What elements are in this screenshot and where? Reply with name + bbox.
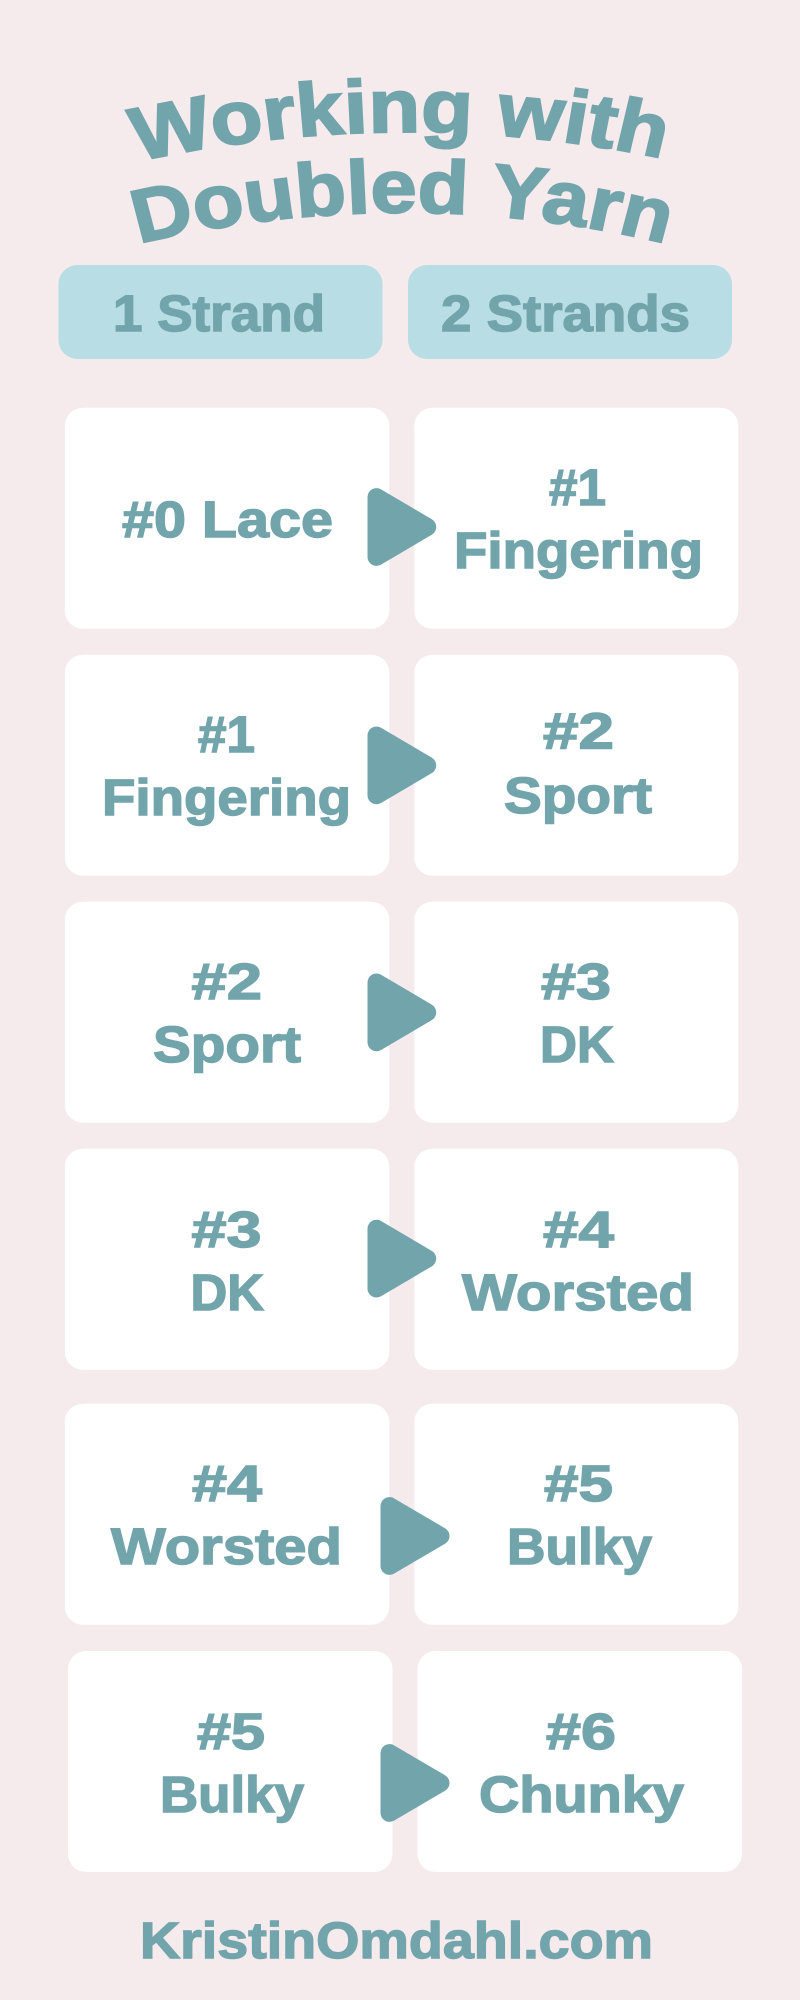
row 1 right card: Fingering xyxy=(454,522,703,579)
row 5 right card: Bulky xyxy=(507,1518,653,1575)
row 3 left card xyxy=(65,902,389,1123)
row 4 left card xyxy=(65,1149,389,1370)
row 1 right card: #1 xyxy=(549,459,606,516)
row 2 right card xyxy=(414,655,738,876)
header: 1 Strand: 1 Strand xyxy=(113,285,325,342)
row 2 left card xyxy=(65,655,389,876)
row 6 left card: #5 xyxy=(197,1703,265,1760)
row 3 right card xyxy=(414,902,738,1123)
row 4 left card: #3 xyxy=(192,1201,262,1258)
row 6 right card xyxy=(418,1651,742,1872)
row 5 left card: #4 xyxy=(192,1455,263,1512)
row 5 right card xyxy=(414,1404,738,1625)
arrow row 1 xyxy=(376,497,427,557)
arrow row 6 xyxy=(390,1753,440,1813)
row 5 left card xyxy=(65,1404,389,1625)
row 3 right card: #3 xyxy=(541,953,611,1010)
row 5 right card: #5 xyxy=(544,1455,613,1512)
arrow row 4 xyxy=(376,1229,427,1288)
row 3 right card: DK xyxy=(540,1016,614,1073)
footer website: KristinOmdahl.com xyxy=(140,1912,653,1969)
row 1 left card xyxy=(65,408,389,629)
row 2 left card: #1 xyxy=(198,706,255,763)
header: 2 Strands xyxy=(408,265,732,359)
row 3 left card: Sport xyxy=(153,1016,301,1073)
row 2 right card: Sport xyxy=(504,767,652,824)
row 5 left card: Worsted xyxy=(111,1518,342,1575)
row 4 right card: Worsted xyxy=(462,1264,694,1321)
row 2 left card: Fingering xyxy=(102,769,351,826)
header: 1 Strand xyxy=(58,265,382,359)
row 6 left card xyxy=(68,1651,392,1872)
row 6 right card: #6 xyxy=(546,1703,616,1760)
row 4 right card: #4 xyxy=(543,1201,615,1258)
arrow row 2 xyxy=(376,736,427,795)
header: 2 Strands: 2 Strands xyxy=(441,285,690,342)
row 1 left card: #0 Lace xyxy=(122,491,333,548)
row 3 left card: #2 xyxy=(192,953,262,1010)
row 4 right card xyxy=(414,1149,738,1370)
row 6 left card: Bulky xyxy=(160,1766,305,1823)
row 6 right card: Chunky xyxy=(479,1766,685,1823)
title xyxy=(124,78,670,244)
row 1 right card xyxy=(414,408,738,629)
arrow row 5 xyxy=(390,1506,440,1566)
row 2 right card: #2 xyxy=(543,702,614,760)
title: Working with xyxy=(124,78,665,160)
title: Doubled Yarn xyxy=(130,158,670,244)
arrow row 3 xyxy=(376,982,427,1042)
row 4 left card: DK xyxy=(190,1264,264,1321)
